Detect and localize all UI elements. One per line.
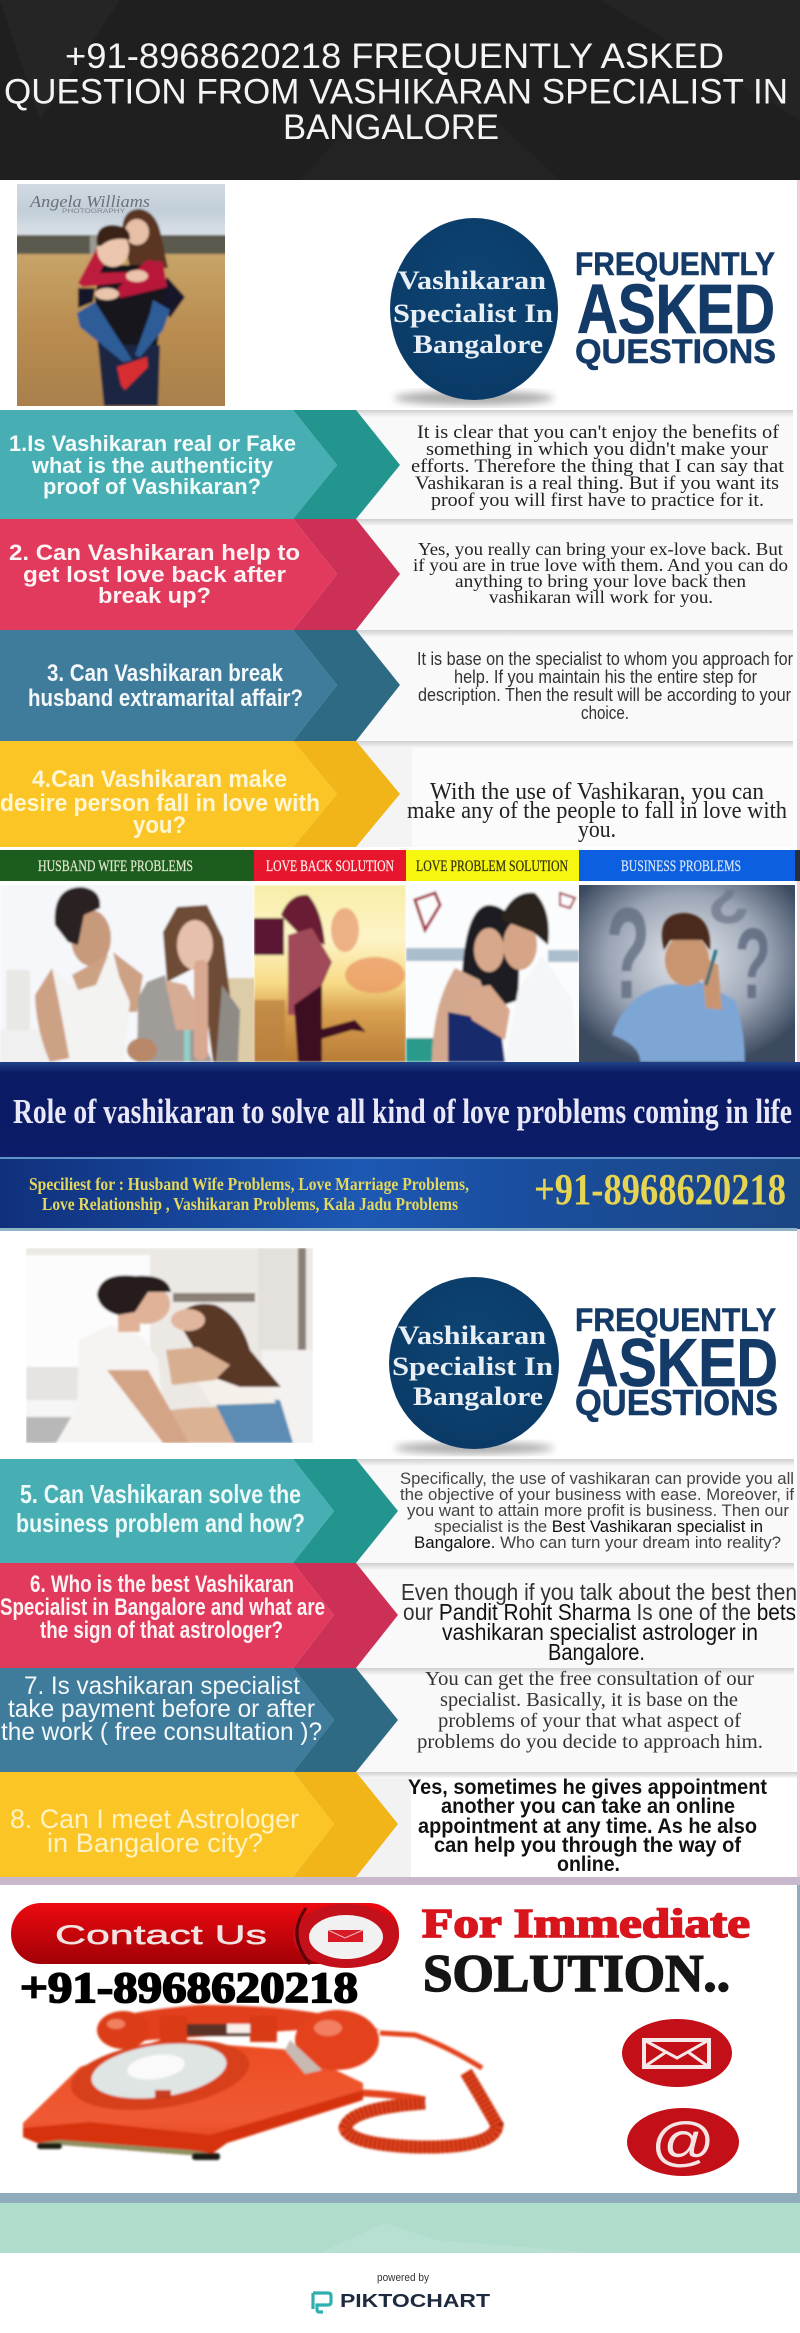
- heading: frequently asked questions: FREQUENTLY: [575, 246, 775, 282]
- FAQ row 2: anything to bring your love back then: [455, 571, 746, 591]
- icon: mail circle: [622, 2019, 732, 2087]
- FAQ row 4: you?: [133, 812, 186, 839]
- heading: for immediate solution: For Immediate: [422, 1900, 750, 1946]
- FAQ row 3: [0, 630, 793, 741]
- FAQ row 5: Bangalore. Who can turn your dream into reality?: [414, 1533, 781, 1552]
- contact us button: Contact Us: [55, 1920, 267, 1950]
- heading: frequently asked questions: QUESTIONS: [575, 333, 776, 371]
- FAQ row 5: specialist is the Best Vashikaran specialist in: [434, 1517, 763, 1536]
- footer strip: blue-grey and mint bands: [0, 1885, 800, 2253]
- FAQ row 1: 1.Is Vashikaran real or Fake: [9, 431, 296, 456]
- FAQ row 6: [0, 1563, 797, 1668]
- FAQ row 2: vashikaran will work for you.: [489, 587, 713, 607]
- photo: piggyback couple in field: Angela Williams: [29, 192, 150, 211]
- FAQ row 3: 3. Can Vashikaran break: [47, 660, 284, 687]
- FAQ row 1: [0, 410, 793, 519]
- icon: at-sign circle: @: [651, 2112, 715, 2172]
- logo: Vashikaran Specialist In Bangalore badge: Vashikaran: [398, 266, 547, 295]
- FAQ row 8: 8. Can I meet Astrologer: [10, 1804, 299, 1834]
- FAQ row 8: Yes, sometimes he gives appointment: [408, 1776, 767, 1799]
- FAQ row 8: [0, 1772, 797, 1877]
- FAQ row 1: Vashikaran is a real thing. But if you want its: [415, 473, 779, 494]
- FAQ row 6: 6. Who is the best Vashikaran: [30, 1571, 294, 1598]
- FAQ row 8: another you can take an online: [441, 1795, 735, 1818]
- photo: piggyback couple in field: [10, 180, 230, 410]
- contact us button: [11, 1903, 399, 1968]
- photo: romantic couple with hearts: [406, 885, 579, 1062]
- FAQ row 2: get lost love back after: [23, 562, 286, 587]
- FAQ row 8: can help you through the way of: [434, 1834, 742, 1857]
- FAQ row 4: With the use of Vashikaran, you can: [430, 779, 764, 805]
- photo: stressed businessman with question marks: ?: [735, 908, 771, 1020]
- photo: stressed businessman with question marks: ?: [606, 880, 650, 1026]
- logo: Vashikaran Specialist In Bangalore badge 2: Vashikaran: [398, 1321, 547, 1350]
- FAQ row 2: [0, 519, 793, 630]
- FAQ row 5: [0, 1459, 794, 1563]
- photo: embracing couple at sunset: [254, 885, 406, 1062]
- FAQ row 5: you want to attain more profit is business. Then our: [407, 1501, 789, 1520]
- footer: powered by label: powered by: [377, 2272, 429, 2284]
- contact band: specialist list and phone number: Speciliest for : Husband Wife Problems, Love Marriage Problems,: [29, 1174, 469, 1194]
- footer: piktochart logo: PIKTOCHART: [340, 2291, 490, 2311]
- FAQ row 6: vashikaran specialist astrologer in: [442, 1619, 758, 1645]
- FAQ row 2: 2. Can Vashikaran help to: [9, 540, 300, 565]
- category tabs: BUSINESS PROBLEMS: [621, 858, 741, 875]
- photo: stressed businessman with question marks: [579, 860, 795, 1062]
- heading: frequently asked questions 2: QUESTIONS: [575, 1382, 778, 1423]
- icon: red rotary telephone: [23, 2005, 497, 2160]
- FAQ row 5: 5. Can Vashikaran solve the: [20, 1479, 301, 1509]
- logo: Vashikaran Specialist In Bangalore badge 2: Specialist In: [392, 1352, 554, 1381]
- FAQ row 4: [0, 741, 793, 847]
- heading: frequently asked questions 2: [575, 1302, 778, 1423]
- photo: worried husband and wife: [0, 880, 255, 1070]
- FAQ row 8: in Bangalore city?: [47, 1828, 263, 1858]
- FAQ row 6: Bangalore.: [548, 1639, 645, 1665]
- FAQ row 4: you.: [578, 817, 616, 843]
- logo: Vashikaran Specialist In Bangalore badge 2: [389, 1277, 559, 1454]
- logo: Vashikaran Specialist In Bangalore badge: [390, 218, 558, 405]
- FAQ row 3: help. If you maintain his the entire step for: [454, 667, 757, 687]
- FAQ row 7: the work ( free consultation )?: [1, 1718, 322, 1746]
- header banner with title: [0, 0, 800, 180]
- heading: for immediate solution: [422, 1900, 750, 2003]
- FAQ row 1: proof of Vashikaran?: [43, 474, 261, 499]
- FAQ row 7: 7. Is vashikaran specialist: [24, 1672, 300, 1700]
- heading: frequently asked questions: [575, 246, 776, 371]
- logo: Vashikaran Specialist In Bangalore badge: Specialist In: [393, 299, 554, 328]
- FAQ row 2: if you are in true love with them. And you can do: [413, 555, 788, 575]
- photo: piggyback couple in field: PHOTOGRAPHY: [62, 209, 125, 215]
- FAQ row 7: problems do you decide to approach him.: [417, 1731, 763, 1753]
- logo: Vashikaran Specialist In Bangalore badge 2: Bangalore: [413, 1382, 543, 1411]
- header banner with title: BANGALORE: [283, 108, 499, 147]
- FAQ row 8: online.: [557, 1853, 620, 1876]
- FAQ row 5: Specifically, the use of vashikaran can provide you all: [400, 1469, 794, 1488]
- FAQ row 3: husband extramarital affair?: [28, 685, 303, 712]
- icon: at-sign circle: [627, 2108, 739, 2176]
- heading: frequently asked questions 2: FREQUENTLY: [575, 1302, 776, 1338]
- FAQ row 5: business problem and how?: [16, 1508, 305, 1538]
- FAQ row 6: Specialist in Bangalore and what are: [0, 1594, 325, 1621]
- FAQ row 6: our Pandit Rohit Sharma Is one of the bets: [403, 1599, 796, 1625]
- category tabs: LOVE PROBLEM SOLUTION: [416, 858, 568, 875]
- FAQ row 7: You can get the free consultation of our: [425, 1668, 754, 1690]
- category tabs: HUSBAND WIFE PROBLEMS: [38, 858, 193, 875]
- FAQ row 3: choice.: [581, 703, 629, 723]
- contact band: specialist list and phone number: Love Relationship , Vashikaran Problems, Kala Jadu Problems: [42, 1194, 458, 1214]
- FAQ row 2: Yes, you really can bring your ex-love back. But: [418, 539, 783, 559]
- logo: Vashikaran Specialist In Bangalore badge: Bangalore: [413, 330, 543, 359]
- FAQ row 7: specialist. Basically, it is base on the: [440, 1689, 738, 1711]
- header banner with title: QUESTION FROM VASHIKARAN SPECIALIST IN: [4, 72, 788, 112]
- photo: stressed businessman with question marks: ?: [707, 860, 750, 938]
- headline band: role of vashikaran: [0, 1062, 800, 1157]
- divider strip: [0, 1877, 800, 1885]
- FAQ row 1: what is the authenticity: [31, 453, 274, 478]
- FAQ row 7: problems of your that what aspect of: [438, 1710, 741, 1732]
- footer: piktochart logo: [313, 2291, 490, 2312]
- FAQ row 7: [0, 1668, 794, 1772]
- heading: for immediate solution: SOLUTION..: [423, 1945, 730, 2003]
- category tabs: LOVE BACK SOLUTION: [266, 858, 394, 875]
- FAQ row 5: the objective of your business with ease. Moreover, if: [400, 1485, 794, 1504]
- FAQ row 6: the sign of that astrologer?: [40, 1617, 283, 1644]
- contact band: specialist list and phone number: [0, 1157, 800, 1231]
- FAQ row 4: desire person fall in love with: [0, 790, 320, 817]
- FAQ row 8: appointment at any time. As he also: [418, 1815, 757, 1838]
- FAQ row 2: break up?: [98, 583, 211, 608]
- photo: couple kissing in kitchen: [26, 1248, 313, 1443]
- category tabs: [0, 850, 800, 881]
- FAQ row 1: It is clear that you can't enjoy the benefits of: [417, 422, 780, 443]
- header banner with title: +91-8968620218 FREQUENTLY ASKED: [65, 37, 724, 76]
- phone number: +91-8968620218: [20, 1965, 358, 2012]
- FAQ row 7: take payment before or after: [8, 1695, 315, 1723]
- FAQ row 1: efforts. Therefore the thing that I can say that: [411, 456, 785, 477]
- FAQ row 4: 4.Can Vashikaran make: [32, 766, 287, 793]
- FAQ row 1: something in which you didn't make your: [426, 439, 769, 460]
- FAQ row 1: proof you will first have to practice for it.: [431, 490, 764, 511]
